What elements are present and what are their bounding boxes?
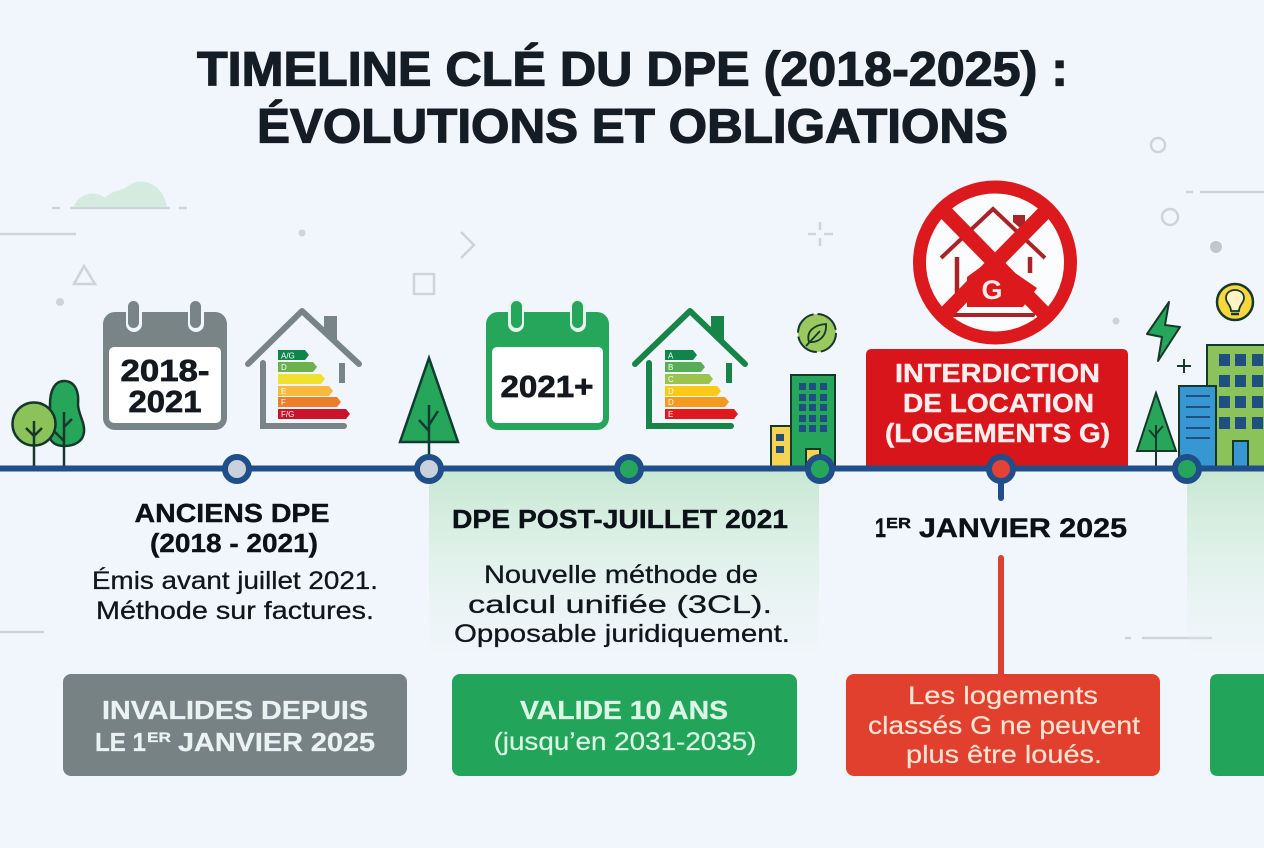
icon: house new energy label: E xyxy=(668,410,673,419)
card: invalides xyxy=(63,674,407,776)
timeline nodes xyxy=(225,457,1199,498)
banner: interdiction de location xyxy=(866,349,1128,468)
icon: calendar 2018-2021 xyxy=(103,299,227,430)
icon: house old energy label: E xyxy=(281,387,286,396)
icon: house old energy label: F/G xyxy=(281,410,294,419)
icon: house old energy label: D xyxy=(281,363,287,372)
card: logements G: Les logements xyxy=(908,682,1098,710)
icon: prohibited house G: G xyxy=(981,275,1003,305)
icon: house new energy label: D xyxy=(668,387,674,396)
icon: house old energy label: F xyxy=(281,398,286,407)
text block: anciens DPE: Méthode sur factures. xyxy=(96,597,374,625)
heading: 1er janvier 2025: ER xyxy=(886,515,911,532)
icon: small fir tree xyxy=(1137,393,1176,466)
icon: house new energy label: D xyxy=(668,398,674,407)
icon: light bulb badge xyxy=(1217,284,1253,320)
banner: interdiction de location: INTERDICTION xyxy=(895,358,1100,388)
card: valide 10 ans xyxy=(452,674,797,776)
icon: city buildings right xyxy=(1179,345,1264,467)
text block: anciens DPE: ANCIENS DPE xyxy=(134,498,330,528)
text block: DPE post-juillet 2021 xyxy=(452,504,790,648)
icon: house new energy label: A xyxy=(668,352,674,360)
title: ÉVOLUTIONS ET OBLIGATIONS xyxy=(257,100,1008,154)
card: invalides: INVALIDES DEPUIS xyxy=(102,695,368,725)
icon: leaf badge xyxy=(798,314,836,352)
icon: fir tree xyxy=(400,358,458,456)
icon: house new energy label: B xyxy=(668,363,673,372)
card: logements G: classés G ne peuvent xyxy=(868,712,1140,740)
icon: cloud xyxy=(74,182,167,207)
title: TIMELINE CLÉ DU DPE (2018-2025) : xyxy=(197,42,1068,96)
icon: calendar 2018-2021: 2021 xyxy=(128,384,202,419)
icon: trees left xyxy=(12,381,84,466)
text block: DPE post-juillet 2021: Opposable juridiquement. xyxy=(454,620,790,648)
icon: prohibited house G xyxy=(920,187,1070,338)
heading: 1er janvier 2025: 1 xyxy=(875,513,886,543)
icon: house old energy label: A/G xyxy=(281,352,295,360)
icon: house old energy label xyxy=(248,311,359,426)
icon: calendar 2018-2021: 2018- xyxy=(120,353,210,388)
banner: interdiction de location: (LOGEMENTS G) xyxy=(885,418,1110,448)
text block: DPE post-juillet 2021: DPE POST-JUILLET 2021 xyxy=(452,504,788,534)
panel: green backdrop right edge xyxy=(1187,470,1264,675)
icon: house new energy label: C xyxy=(668,375,674,384)
icon: plus xyxy=(1177,359,1191,373)
panel: green backdrop post-2021 xyxy=(429,470,819,675)
decorative background shapes xyxy=(0,138,1264,638)
icon: calendar 2021+ xyxy=(486,299,609,430)
card: invalides: ER xyxy=(147,729,171,745)
icon: calendar 2021+: 2021+ xyxy=(500,369,594,404)
icon: house new energy label xyxy=(635,311,745,426)
card: valide 10 ans: (jusqu’en 2031-2035) xyxy=(494,728,756,756)
icon: green building xyxy=(771,375,835,467)
card: logements G xyxy=(846,674,1160,776)
card: valide 10 ans: VALIDE 10 ANS xyxy=(520,695,728,725)
heading: 1er janvier 2025: JANVIER 2025 xyxy=(919,513,1127,543)
banner: interdiction de location: DE LOCATION xyxy=(903,388,1094,418)
text block: anciens DPE xyxy=(92,498,378,625)
icon: lightning bolt xyxy=(1147,302,1180,361)
timeline axis xyxy=(0,466,1264,472)
text block: anciens DPE: (2018 - 2021) xyxy=(150,528,318,558)
text block: DPE post-juillet 2021: Nouvelle méthode de xyxy=(484,561,758,589)
title xyxy=(197,42,1068,154)
card: invalides: LE 1 xyxy=(95,727,146,757)
card: invalides: JANVIER 2025 xyxy=(178,727,375,757)
card: logements G: plus être loués. xyxy=(906,741,1102,769)
text block: anciens DPE: Émis avant juillet 2021. xyxy=(92,566,378,595)
connector: red stem xyxy=(998,558,1004,675)
card: cropped green right xyxy=(1210,674,1264,776)
text block: DPE post-juillet 2021: calcul unifiée (3CL). xyxy=(468,591,772,619)
